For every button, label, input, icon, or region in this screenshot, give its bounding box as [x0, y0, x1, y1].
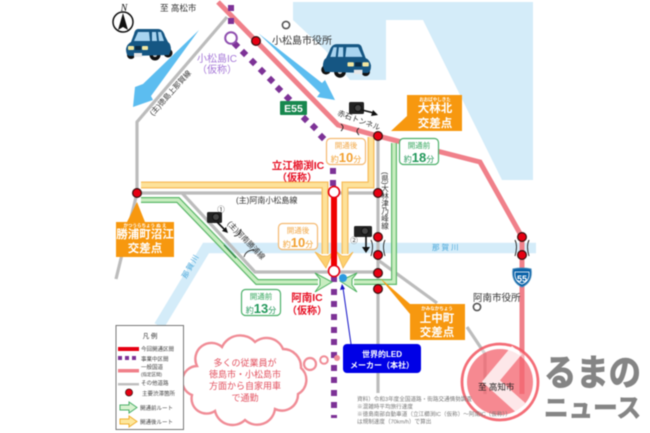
- time box: after 10 min, top: [326, 138, 366, 165]
- time box: before 18 min: [400, 138, 438, 165]
- source notes: [357, 395, 511, 426]
- time box: before 18 min: 約18分: [404, 150, 434, 165]
- camera 3 at Akaishi tunnel: [349, 102, 378, 116]
- legend: [116, 326, 184, 430]
- bridge and tunnel marks: [224, 124, 529, 258]
- place labels: (主)徳島上那賀線: [147, 68, 193, 117]
- place labels: 阿南市役所: [473, 292, 521, 304]
- Komatsushima IC circle: [225, 32, 237, 44]
- time box: after 10 min, lower: 約10分: [283, 235, 313, 250]
- yellow after-opening route, left: [141, 185, 333, 268]
- river: Naka River: [159, 248, 536, 326]
- source notes: ※徳島南部自動車道（立江櫛渕IC（仮称）～阿南IC（仮称））: [357, 410, 511, 418]
- yellow after-opening route, right: [337, 137, 371, 268]
- place labels: (主)阿南小松島線: [236, 195, 297, 205]
- callout: Katsuura-cho Nusue intersection: 勝浦町沼江: [116, 227, 174, 241]
- car: right: [321, 44, 371, 78]
- legend: 事業中区間: [141, 355, 169, 363]
- blue arrow toward Tokushima road: [133, 30, 199, 107]
- callout: Kaminaka-cho intersection: かみなかちょう: [421, 305, 453, 312]
- red opening section with interchanges: [328, 186, 340, 276]
- Komatsushima IC label: （仮称）: [197, 63, 237, 76]
- callout: Obayashi-kita intersection: 大林北: [418, 101, 453, 115]
- thought cloud: 方面から自家用車: [209, 380, 281, 391]
- purple dotted planned section: [228, 5, 337, 418]
- callout: LED maker headquarters: メーカー（本社）: [350, 360, 414, 370]
- legend: 凡 例: [143, 331, 158, 340]
- callout: Kaminaka-cho intersection: 上中町: [420, 311, 455, 325]
- time box: before 13 min: 開通前: [250, 291, 273, 301]
- river labels: 那賀川: [179, 252, 201, 280]
- compass: [113, 3, 133, 32]
- place labels: 小松島市役所: [272, 34, 332, 47]
- route 55 shield: [513, 268, 531, 287]
- time box: after 10 min, lower: [278, 224, 318, 250]
- time box: before 18 min: 開通前: [408, 140, 431, 150]
- legend: 一般国道: [141, 363, 164, 371]
- camera 1: ①: [217, 205, 225, 214]
- callout: Kaminaka-cho intersection: [380, 278, 465, 340]
- compass: N: [120, 3, 129, 14]
- callout: Kaminaka-cho intersection: 交差点: [420, 325, 455, 339]
- green before-opening route, right: [340, 143, 394, 292]
- sea area: [293, 2, 533, 180]
- city hall markers: [282, 21, 481, 311]
- camera 1: [207, 205, 228, 233]
- place labels: [147, 3, 521, 392]
- legend: 主要渋滞箇所: [142, 390, 176, 398]
- source notes: は規制速度（70km/h）で算出: [357, 418, 431, 426]
- place labels: (県)大林津乃峰線: [380, 172, 390, 231]
- green before-opening route, left: [141, 200, 332, 292]
- legend: 今回開通区間: [141, 345, 175, 353]
- congestion points: [133, 37, 526, 293]
- place labels: 至 高知市: [478, 382, 515, 392]
- E55 sign: E55: [284, 103, 303, 115]
- Anan IC label: [287, 291, 327, 317]
- source notes: ※混雑時平均旅行速度: [357, 402, 413, 410]
- legend: 開通後ルート: [140, 418, 173, 426]
- watermark logotype: [544, 352, 641, 423]
- thought cloud: で通勤: [231, 392, 259, 403]
- Anan IC label: 阿南IC: [291, 291, 323, 304]
- camera 2: [350, 226, 372, 253]
- callout: LED maker headquarters: 世界的LED: [362, 349, 402, 359]
- time box: after 10 min, top: 開通後: [335, 140, 358, 150]
- place labels: (主)阿南勝浦線: [226, 218, 268, 262]
- national road E55 pink: [218, 2, 522, 394]
- watermark logotype: ニュース: [544, 393, 641, 423]
- Komatsushima IC label: [197, 52, 237, 76]
- callout: Obayashi-kita intersection: [391, 95, 462, 131]
- time box: after 10 min, top: 約10分: [331, 150, 361, 165]
- callout: LED maker headquarters: [343, 344, 421, 373]
- callout: Katsuura-cho Nusue intersection: [116, 202, 174, 257]
- route 55 shield: 55: [517, 274, 527, 284]
- river labels: 那賀川: [432, 242, 460, 252]
- thought cloud: 徳島市・小松島市: [209, 368, 281, 380]
- river labels: [179, 242, 461, 280]
- Tatsue Kushibuchi IC label: （仮称）: [277, 171, 317, 184]
- blue arrow toward E55: [258, 33, 335, 100]
- E55 sign: [280, 101, 307, 115]
- thought cloud: [182, 335, 340, 425]
- callout: Obayashi-kita intersection: おおばやしきた: [419, 96, 451, 103]
- callout: Katsuura-cho Nusue intersection: 交差点: [128, 241, 163, 255]
- source notes: 資料）令和3年度全国道路・街路交通情勢調査: [357, 395, 472, 403]
- legend: (指定区間): [141, 371, 162, 378]
- thought cloud: 多くの従業員が: [213, 357, 277, 368]
- car: left: [126, 29, 172, 60]
- time box: before 13 min: [242, 290, 280, 316]
- Tatsue Kushibuchi IC label: 立江櫛渕IC: [272, 159, 325, 172]
- time box: after 10 min, lower: 開通後: [287, 225, 310, 235]
- place labels: 至 高松市: [160, 3, 197, 13]
- camera 2: ②: [350, 236, 358, 245]
- callout: Obayashi-kita intersection: 交差点: [418, 116, 453, 130]
- watermark logotype: るまの: [544, 352, 641, 393]
- grey roads: [116, 17, 485, 394]
- legend: その他道路: [141, 379, 169, 387]
- place labels: 赤石トンネル: [336, 108, 382, 132]
- watermark emblem: [462, 344, 538, 420]
- callout: Katsuura-cho Nusue intersection: かつうらちょう ぬ え: [124, 222, 167, 229]
- time box: before 13 min: 約13分: [246, 301, 276, 316]
- legend: 開通前ルート: [140, 404, 173, 412]
- Komatsushima IC label: 小松島IC: [197, 52, 237, 65]
- Tatsue Kushibuchi IC label: [272, 159, 325, 184]
- Anan IC label: （仮称）: [287, 304, 327, 317]
- LED maker location marker and arrow: [339, 274, 351, 344]
